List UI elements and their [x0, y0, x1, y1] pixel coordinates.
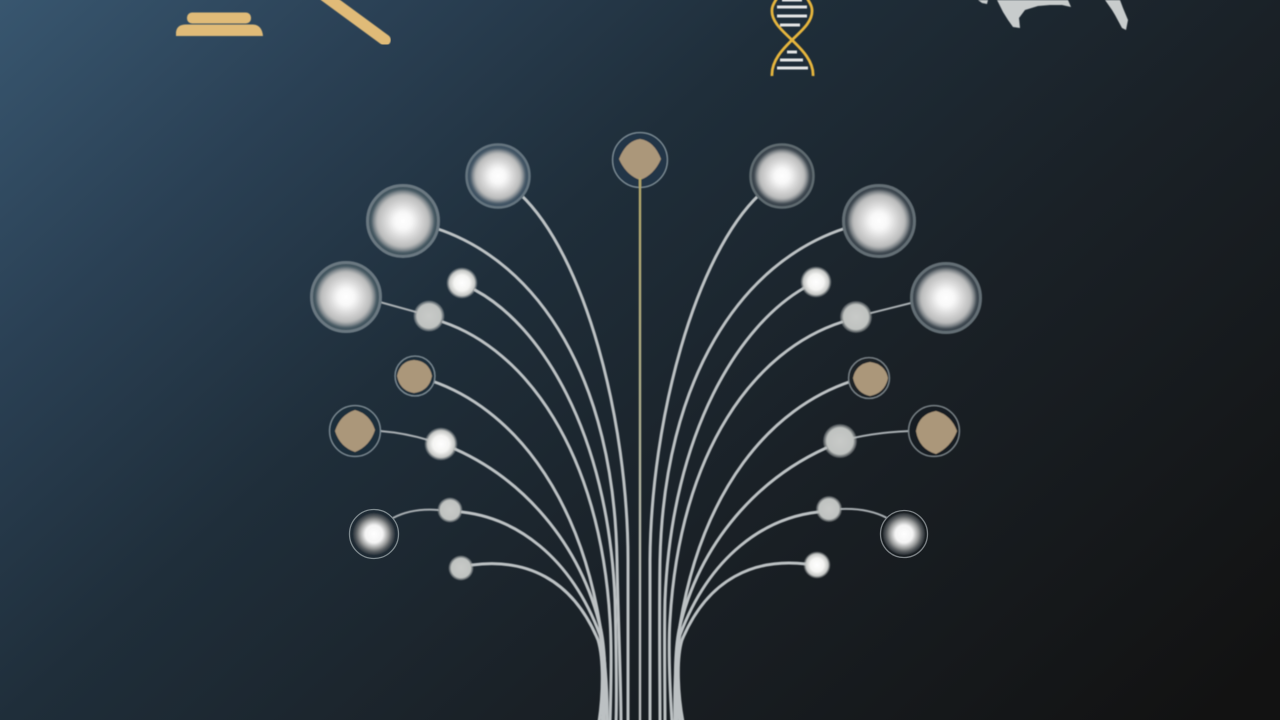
icon: gavel handle: [325, 0, 385, 40]
nodes: tan diamonds: [330, 132, 960, 456]
left branches: [432, 194, 628, 720]
tree network: [376, 180, 915, 720]
thin connectors to outer nodes: [376, 301, 915, 518]
central stem: [639, 180, 641, 720]
nodes: large glowing orbs: [312, 144, 980, 332]
icon: DNA helix: [772, 0, 813, 76]
right branches: [650, 194, 852, 720]
icon: map fragment: [978, 0, 1128, 30]
nodes: dark ringed orbs: [350, 510, 928, 558]
icon: gavel base: [176, 12, 263, 36]
nodes: small glowing and dull dots: [414, 266, 872, 580]
